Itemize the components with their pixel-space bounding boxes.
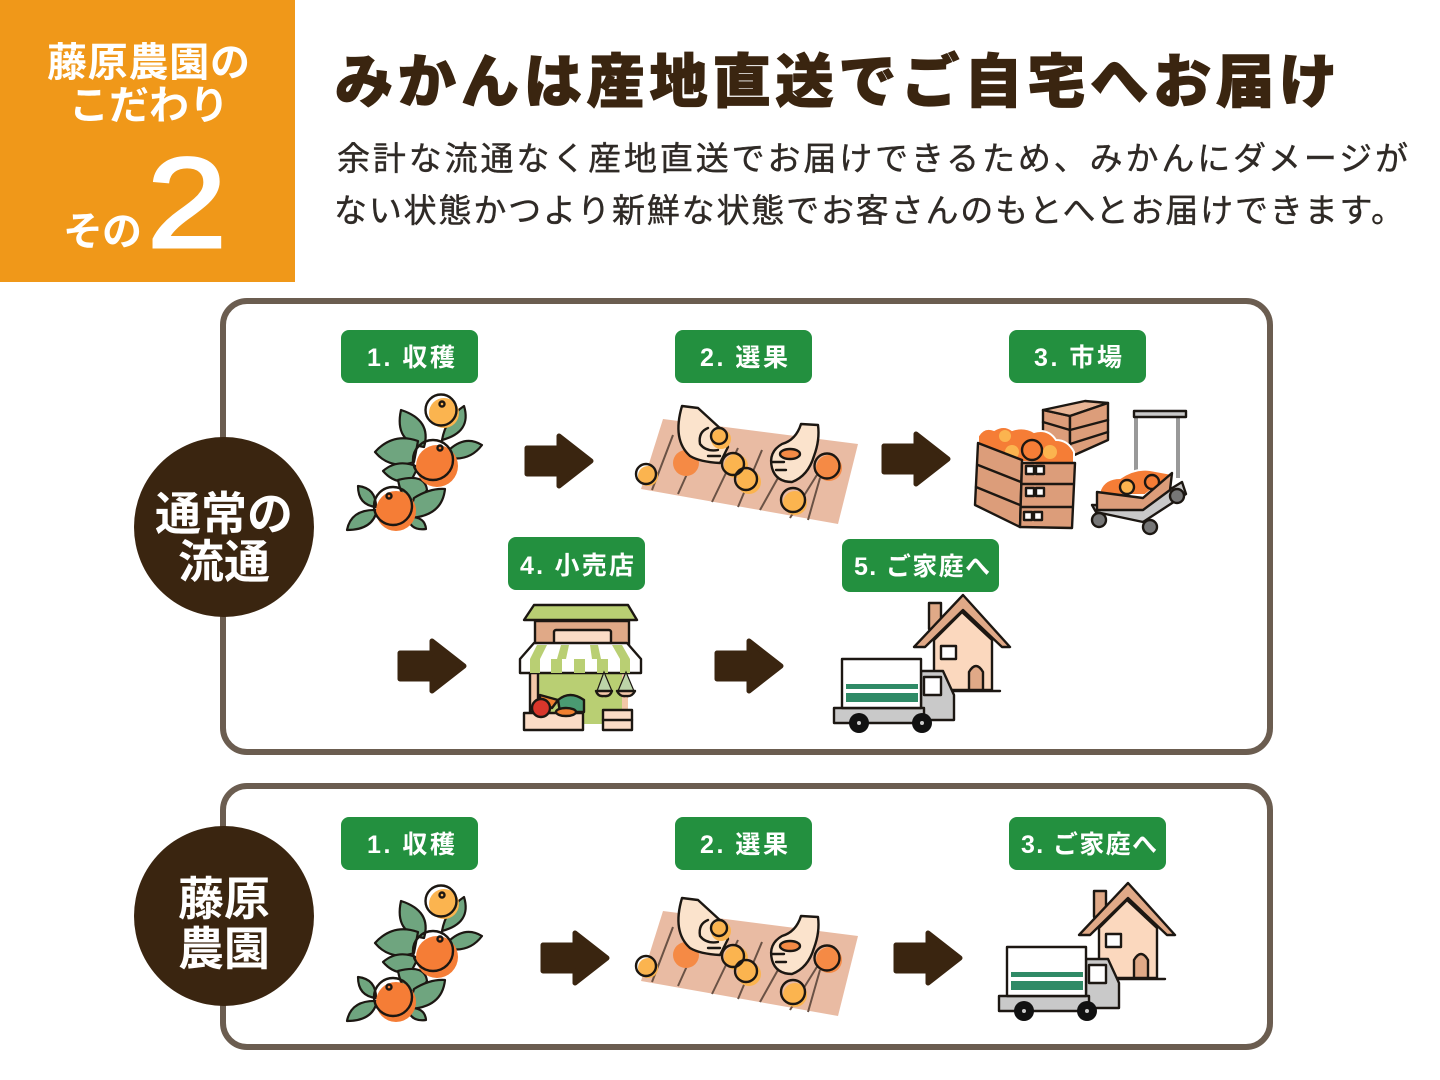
step badge: sorting (farm): 2. 選果: [700, 831, 788, 859]
icon: orange branch: [347, 394, 482, 531]
step badge: retail store: [508, 537, 645, 590]
panel: Fujiwara farm distribution: [223, 786, 1270, 1047]
header badge: その: [63, 210, 142, 254]
icon: delivery truck and house (farm): [999, 883, 1175, 1021]
step badge: retail store: 4. 小売店: [520, 552, 634, 580]
arrow 5: [543, 933, 607, 983]
arrow 3: [400, 641, 464, 691]
arrow 2: [884, 434, 948, 484]
icon: orange branch (farm): [347, 886, 482, 1022]
step badge: home delivery (farm): 3. ご家庭へ: [1021, 830, 1157, 859]
header badge: [0, 0, 295, 282]
icon: hands sorting oranges: [636, 406, 858, 524]
step badge: sorting (farm): [675, 817, 812, 870]
label circle: normal distribution: 通常の: [155, 488, 293, 540]
label circle: Fujiwara farm: 農園: [178, 923, 270, 975]
step badge: harvest: 1. 収穫: [367, 344, 455, 372]
step badge: sorting: [675, 330, 812, 383]
panel: normal distribution: [223, 301, 1270, 752]
icon: delivery truck and house: [834, 595, 1010, 733]
title: みかんは産地直送でご自宅へお届け: [335, 50, 1337, 115]
icon: market crates and cart: [975, 401, 1186, 534]
step badge: harvest (farm): 1. 収穫: [367, 831, 455, 859]
step badge: market: 3. 市場: [1034, 344, 1122, 372]
header badge: 2: [147, 131, 227, 274]
description text: ない状態かつより新鮮な状態でお客さんのもとへとお届けできます。: [334, 192, 1404, 229]
step badge: harvest: [341, 330, 478, 383]
step badge: home delivery (farm): [1009, 817, 1166, 870]
icon: retail store: [520, 605, 641, 730]
label circle: normal distribution: [134, 437, 314, 617]
label circle: Fujiwara farm: [134, 826, 314, 1006]
step badge: home delivery: [842, 539, 999, 592]
icon: hands sorting oranges (farm): [636, 898, 858, 1016]
step badge: sorting: 2. 選果: [700, 344, 788, 372]
label circle: normal distribution: 流通: [178, 536, 270, 588]
arrow 4: [717, 641, 781, 691]
header badge: 藤原農園の: [47, 41, 250, 85]
arrow 1: [527, 436, 591, 486]
arrow 6: [896, 933, 960, 983]
description text: [334, 140, 1408, 229]
step badge: home delivery: 5. ご家庭へ: [854, 552, 990, 581]
header badge: こだわり: [69, 84, 229, 128]
step badge: harvest (farm): [341, 817, 478, 870]
step badge: market: [1009, 330, 1146, 383]
label circle: Fujiwara farm: 藤原: [178, 873, 270, 925]
description text: 余計な流通なく産地直送でお届けできるため、みかんにダメージが: [337, 140, 1408, 177]
